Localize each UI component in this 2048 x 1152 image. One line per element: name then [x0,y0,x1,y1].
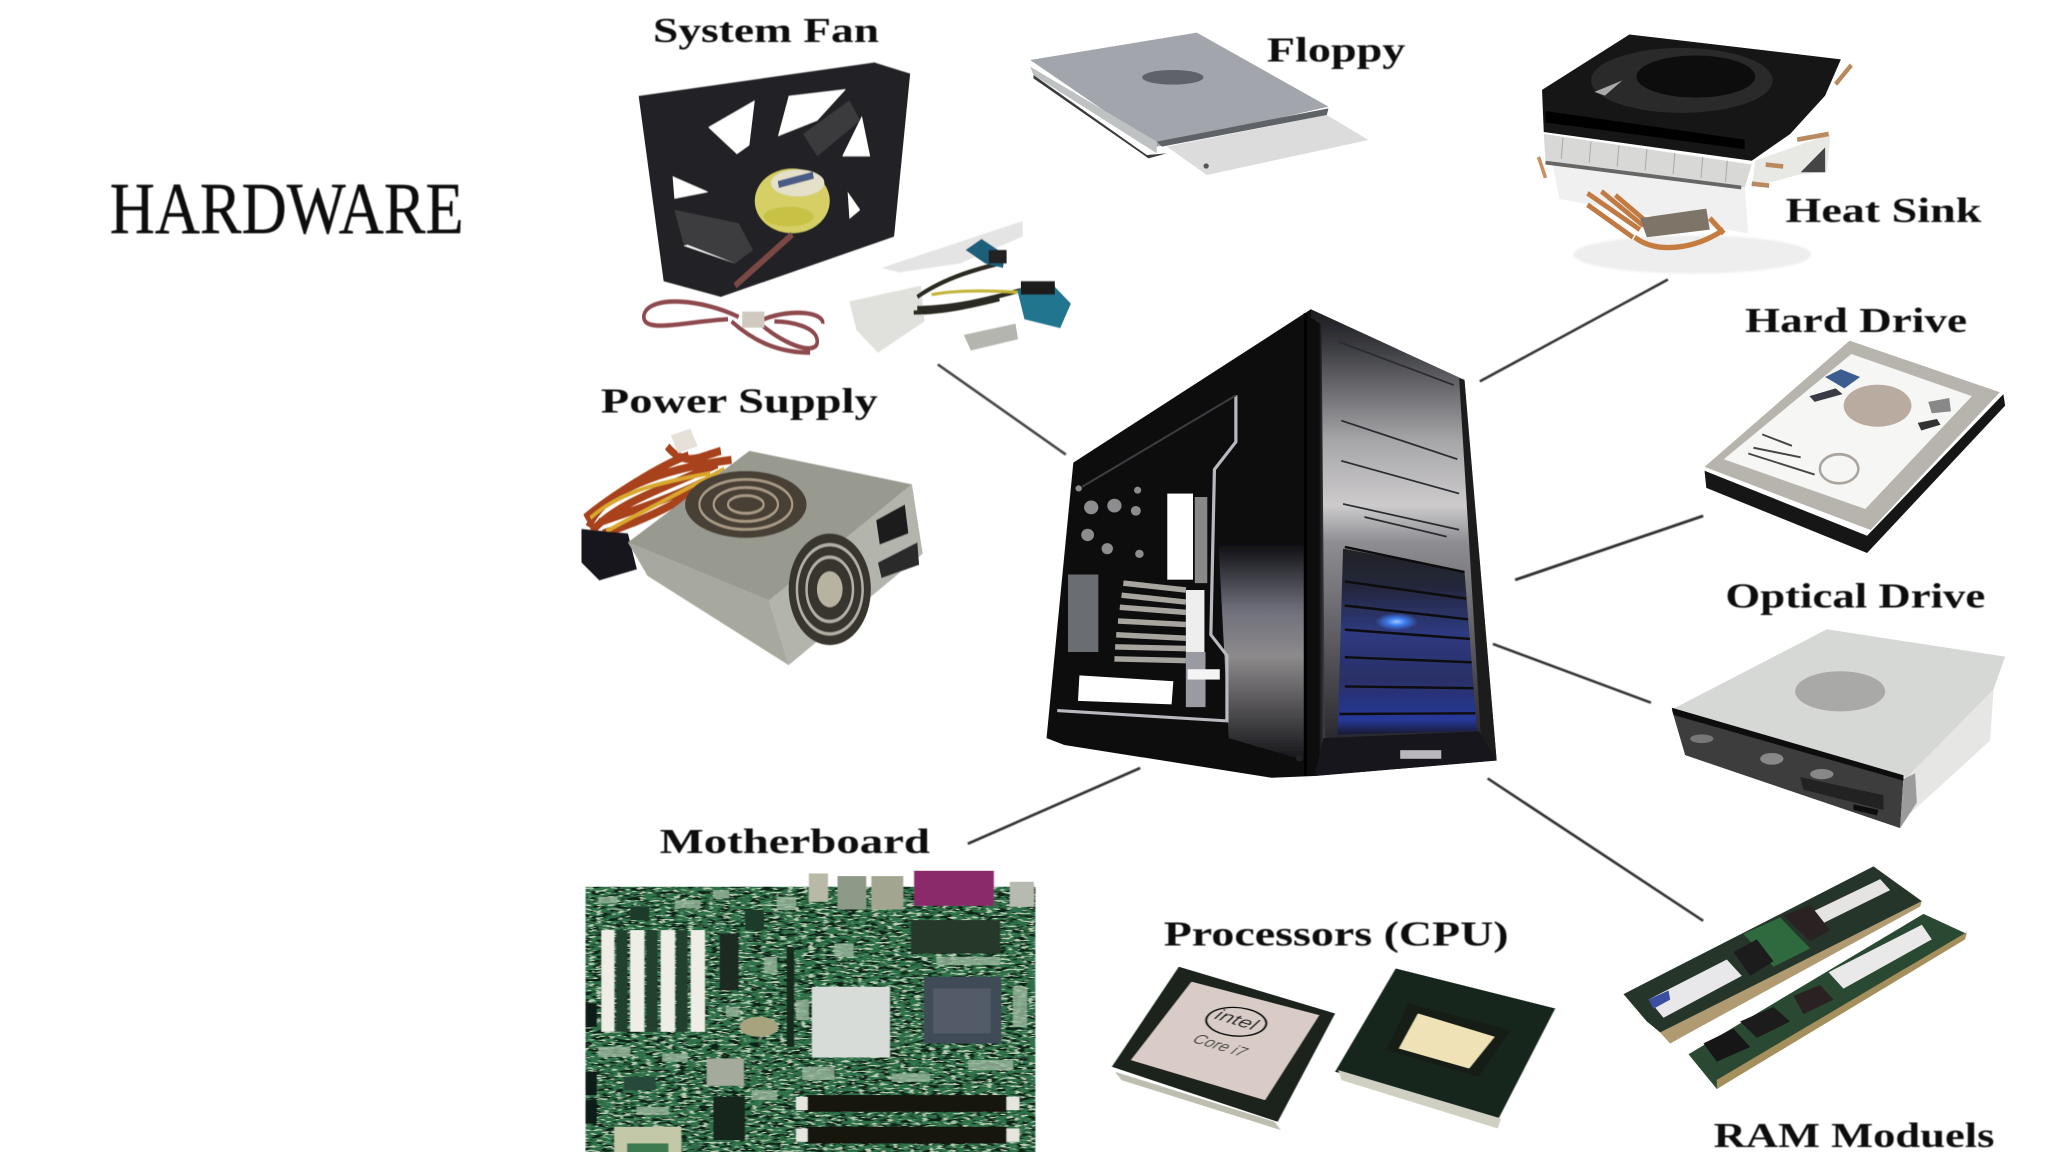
connector: motherboard [968,768,1140,844]
icon: optical drive [1672,629,2005,828]
label: Power Supply: Power Supply [601,382,878,421]
icon: processor underside [1335,968,1555,1128]
icon: RAM modules [1623,866,1967,1089]
speckled traces [598,890,1027,1115]
icon: system fan [639,63,1071,353]
connector: hard drive [1515,516,1703,580]
board mottling light [586,887,1035,1152]
label: Processors (CPU): Processors (CPU) [1164,915,1509,954]
label: Heat Sink: Heat Sink [1785,191,1982,230]
rear ports [809,871,1034,909]
connector: heat sink [1480,280,1668,381]
psu casing [628,451,912,600]
connector: optical drive [1493,644,1651,703]
connector: floppy [1244,183,1246,330]
label: Hard Drive: Hard Drive [1745,301,1967,340]
cable kit [882,221,1023,272]
connector: power supply [925,651,1044,653]
label: Floppy: Floppy [1267,30,1406,69]
label: System Fan: System Fan [653,11,880,50]
icon: computer tower [1047,309,1497,778]
icon: processor with heat spreader [1112,967,1335,1130]
cpu model text: Core i7 [1188,1032,1252,1060]
fan frame [639,63,910,297]
RAM module upper [1623,866,1922,1043]
icon: hard drive [1705,341,2005,553]
fan wires [644,302,823,353]
connector: RAM [1488,778,1703,921]
icon: heat sink [1539,34,1851,274]
label: Optical Drive: Optical Drive [1725,576,1985,615]
power cables [585,446,732,533]
connector: system fan [938,364,1066,455]
label: Motherboard: Motherboard [660,822,930,861]
memory slots [796,1095,1019,1143]
RAM module lower [1688,914,1967,1089]
icon: power supply [581,429,923,665]
cpu logo text: intel [1209,1007,1265,1033]
icon: motherboard [586,871,1035,1152]
connector: processor [1320,789,1323,889]
board mottling dark [586,887,1035,1152]
icon: floppy drive [1030,33,1368,175]
expansion slots [602,930,705,1032]
title: HARDWARE [110,168,464,249]
